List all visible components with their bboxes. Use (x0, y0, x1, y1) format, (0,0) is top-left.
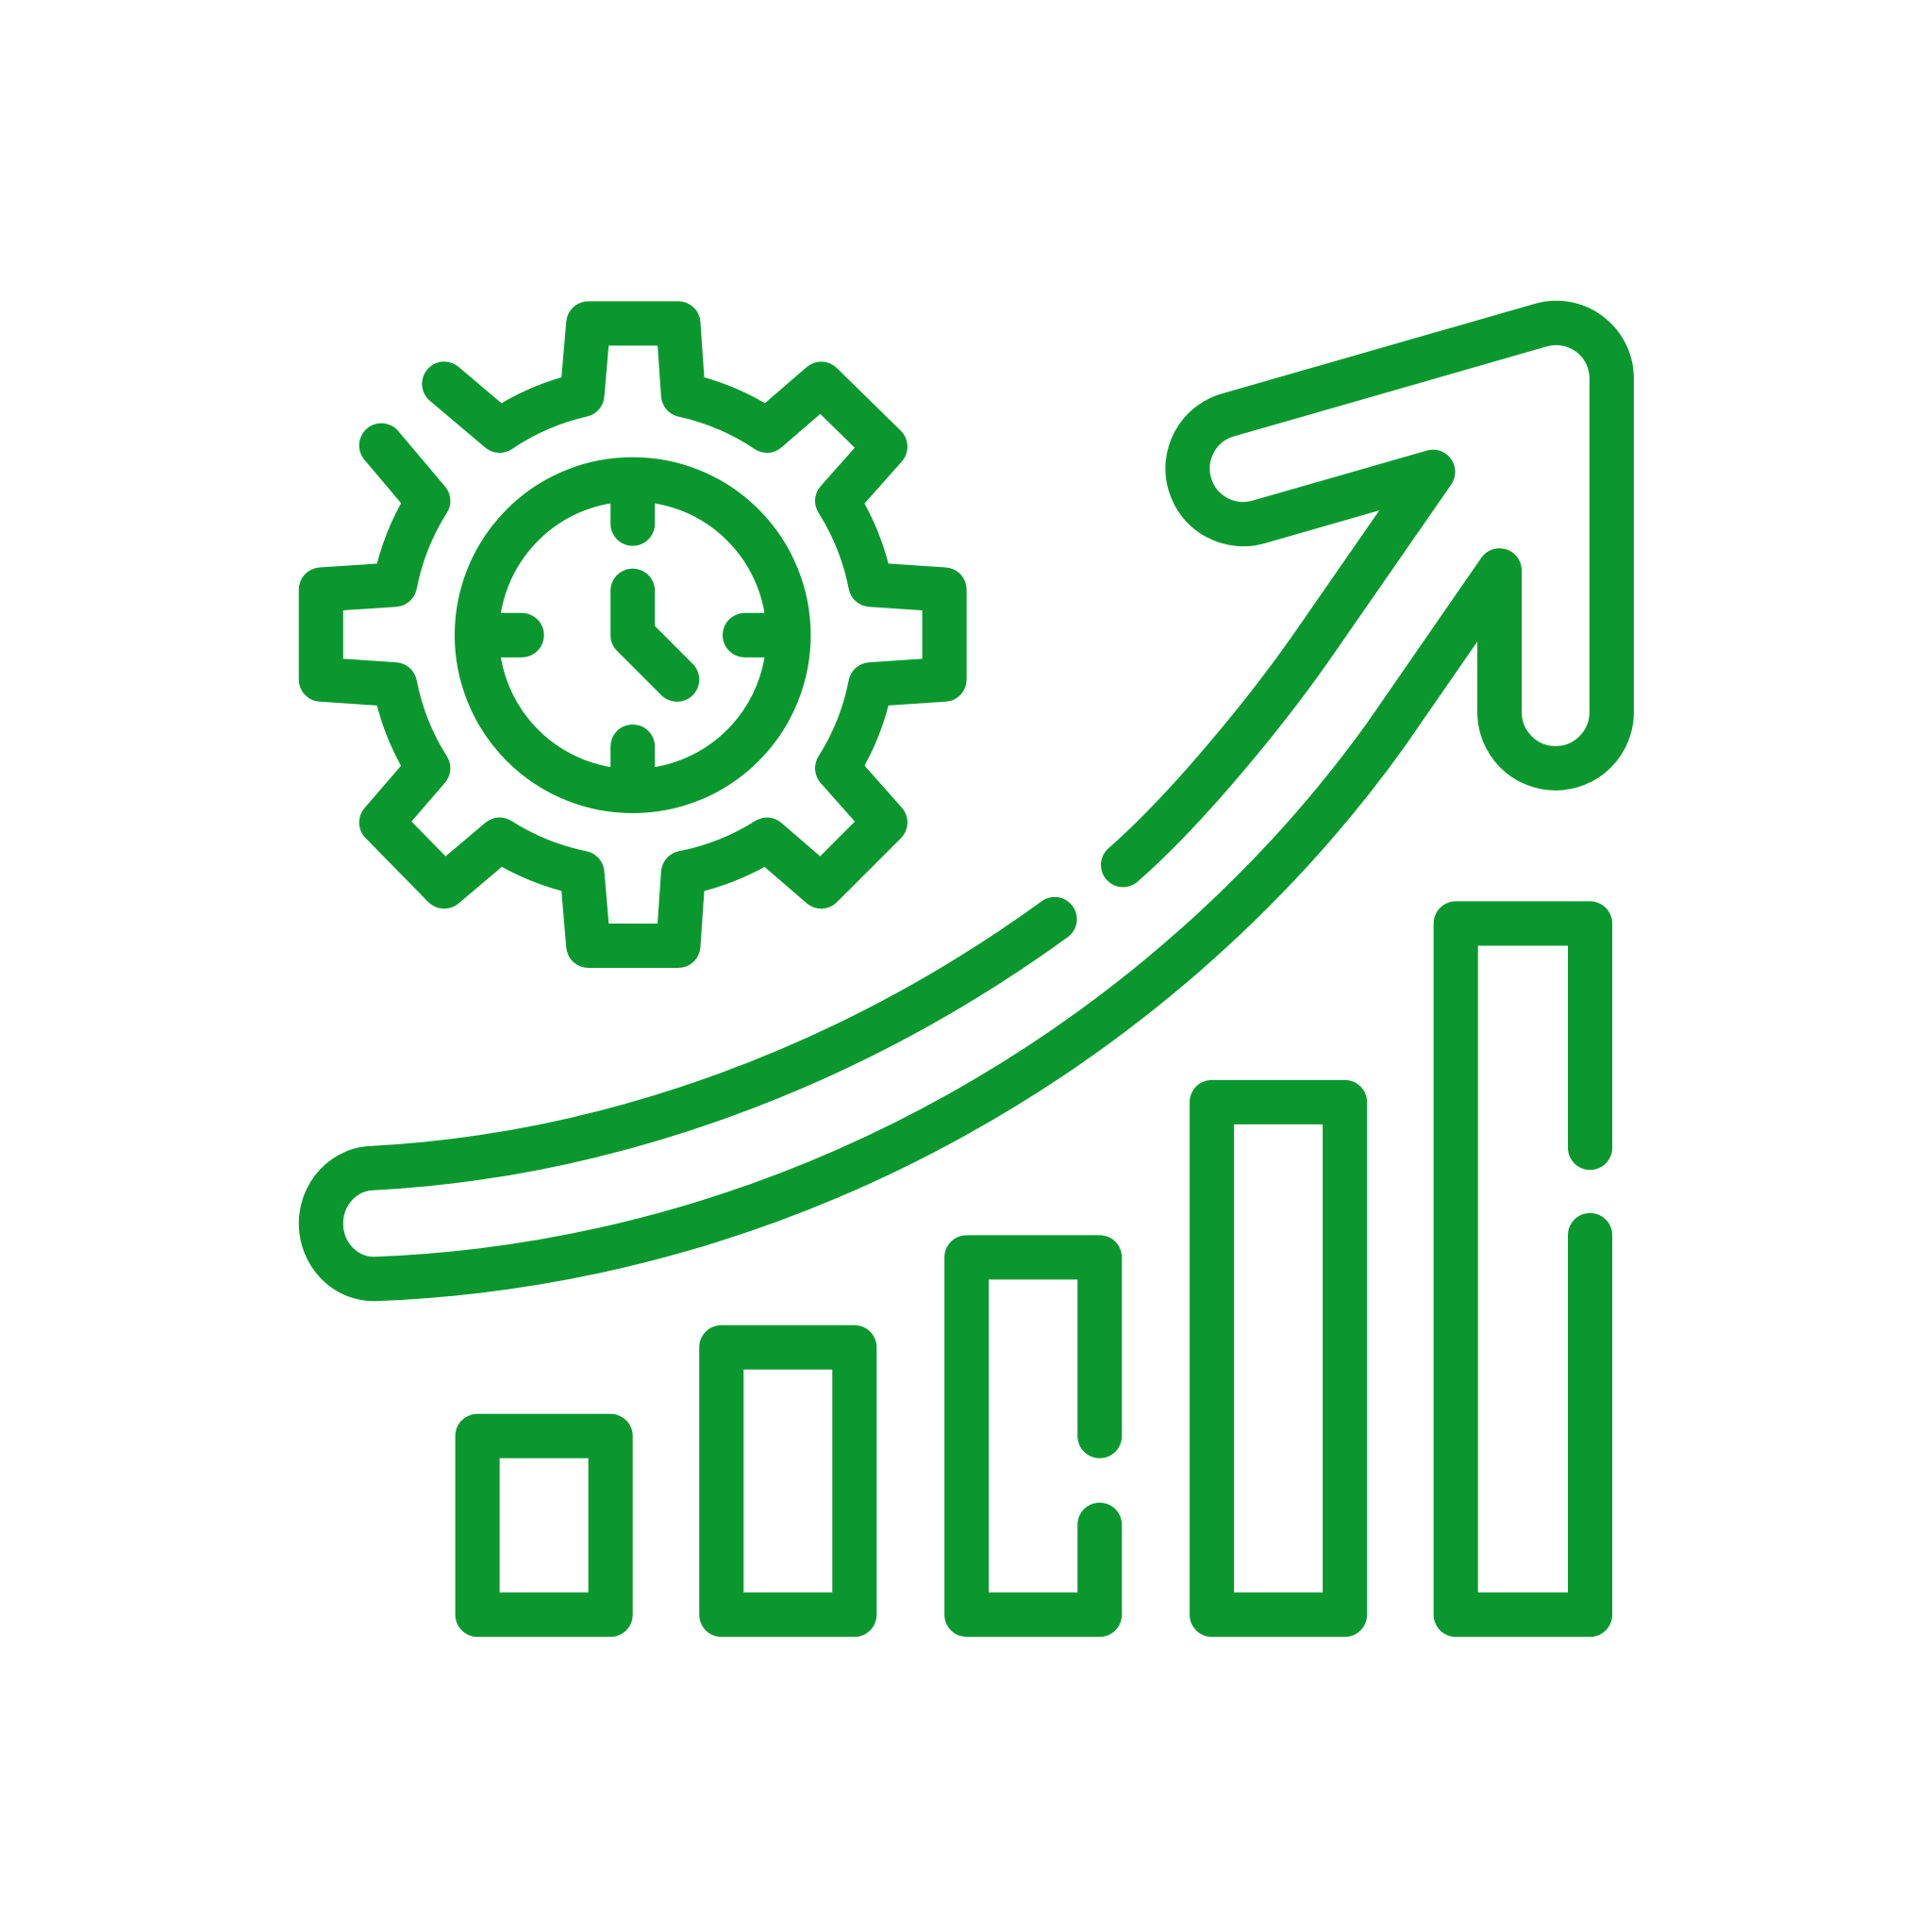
bar 4 (1212, 1102, 1345, 1615)
arrow: rising growth curve (321, 323, 1611, 1279)
bar 1 (477, 1436, 610, 1615)
clock face (476, 479, 789, 791)
bar 2 (722, 1347, 855, 1615)
gear outline (321, 324, 944, 945)
clock ticks (481, 484, 784, 787)
icon: gear with clock (321, 324, 944, 945)
bar 5 (1456, 924, 1591, 1615)
bar 3 (967, 1257, 1100, 1615)
bar chart (477, 924, 1591, 1615)
clock hands (633, 591, 677, 679)
